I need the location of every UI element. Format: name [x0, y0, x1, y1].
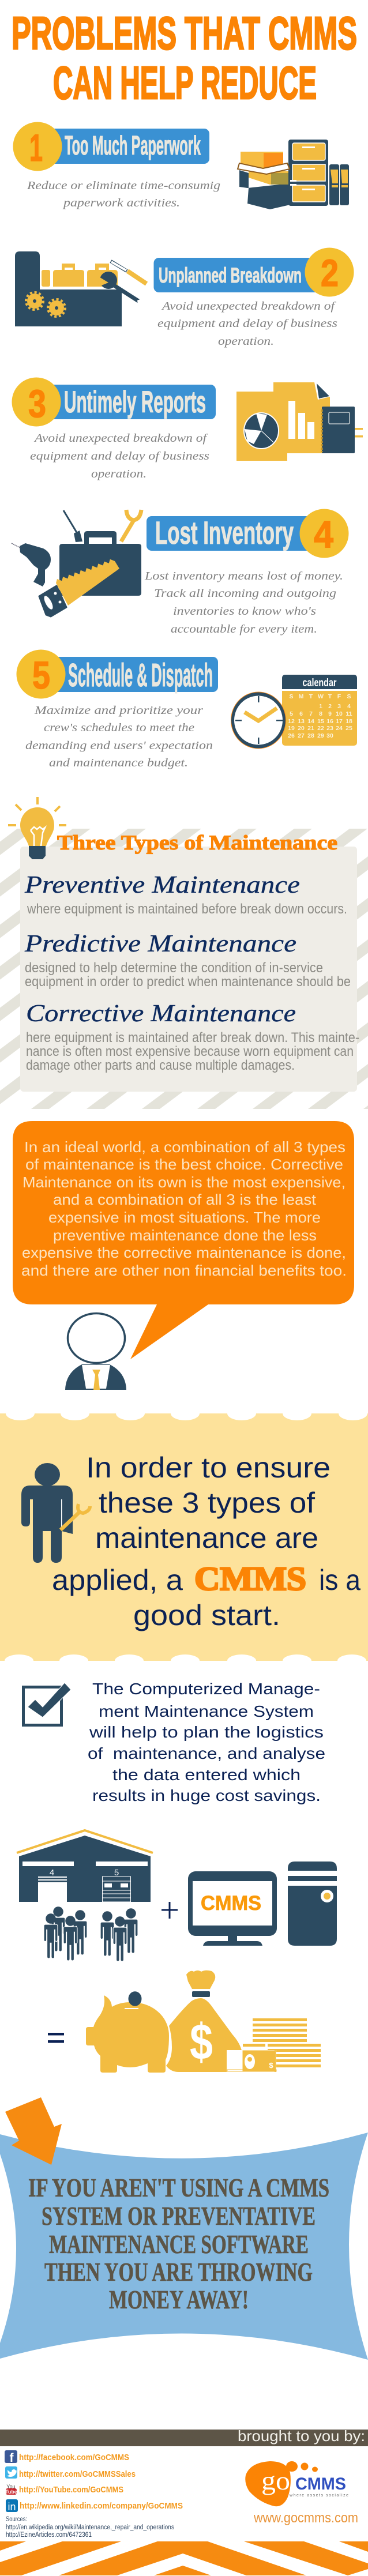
heading bar: untimely reports: 3	[28, 382, 46, 426]
logo: gocmms: CMMS	[295, 2475, 346, 2494]
icon: calendar: T	[309, 693, 313, 700]
description 5: Maximize and prioritize your	[34, 704, 203, 717]
description 3: Avoid unexpected breakdown of	[33, 432, 208, 445]
heading bar: schedule and dispatch: 5	[32, 654, 50, 697]
description 2: equipment and delay of business	[157, 317, 337, 330]
problem 1: too much paperwork	[13, 122, 349, 209]
logo: gocmms	[245, 2461, 348, 2506]
icon: clock	[231, 692, 286, 749]
icon: calendar: 15	[317, 718, 324, 725]
icon: computer with cmms	[188, 1862, 337, 1946]
description 2: Avoid unexpected breakdown of	[161, 300, 336, 313]
heading bar: untimely reports	[12, 377, 216, 427]
icon: calendar: 29	[317, 732, 324, 739]
icon: calendar: 6	[299, 710, 303, 717]
closing text	[28, 2173, 329, 2314]
icon: calendar: 9	[328, 710, 332, 717]
icon: calendar: 8	[319, 710, 322, 717]
icon: facebook	[5, 2450, 17, 2465]
icon: group of workers	[44, 1906, 138, 1961]
text: what the computerized maintenance system does: of maintenance, and analyse	[88, 1744, 325, 1762]
icon: calendar: 26	[288, 732, 295, 739]
icon: calendar: calendar	[302, 677, 337, 689]
text: what the computerized maintenance system does: ment Maintenance System	[99, 1702, 314, 1720]
heading bar: too much paperwork: 1	[29, 126, 43, 169]
icon: linkedin: in	[7, 2501, 16, 2513]
icon: calendar: F	[337, 693, 341, 700]
panel card	[20, 847, 357, 1092]
icon: calendar: 18	[346, 718, 352, 725]
callout: ideal world speech bubble	[13, 1121, 354, 1359]
icon: calendar: 3	[337, 703, 341, 710]
description 3: equipment and delay of business	[30, 450, 209, 462]
banner text: In order to ensure	[86, 1451, 331, 1484]
icon: warehouse: 4	[50, 1868, 54, 1878]
callout: ideal world speech bubble: Maintenance on its own is the most expensive,	[22, 1174, 346, 1191]
panel: closing message	[0, 2097, 368, 2360]
logo: gocmms: where assets socialize	[289, 2494, 348, 2498]
icon: worker with wrench	[21, 1463, 90, 1563]
title	[12, 7, 357, 108]
twitter link: http://twitter.com/GoCMMSSales	[19, 2469, 136, 2479]
description 5: and maintenance budget.	[49, 757, 188, 769]
footer bar: brought to you by	[0, 2427, 368, 2446]
description 4: Lost inventory means lost of money.	[144, 570, 343, 582]
icon: calendar: 5	[290, 710, 293, 717]
preventive maintenance: Preventive Maintenance	[24, 872, 300, 898]
icon: calendar: M	[299, 693, 304, 700]
icon: business person	[65, 1314, 126, 1390]
icon: report folder with charts and notebook	[236, 382, 363, 461]
footer bar: brought to you by: brought to you by:	[238, 2427, 365, 2445]
description 1	[27, 179, 220, 209]
panel: three types of maintenance	[0, 797, 368, 1109]
icon: calendar: 19	[288, 725, 295, 732]
icon: piggy bank, money bag and cash: $	[190, 2013, 213, 2070]
heading bar: too much paperwork	[13, 122, 209, 171]
problem 5: schedule and dispatch	[16, 649, 357, 769]
heading bar: lost inventory	[147, 509, 348, 558]
callout: ideal world speech bubble: preventive maintenance done the less	[53, 1227, 317, 1244]
banner text: CMMS	[194, 1560, 306, 1597]
text: what the computerized maintenance system does: the data entered which	[112, 1766, 301, 1784]
banner text: good start.	[133, 1599, 280, 1631]
icon: calendar: 4	[347, 703, 351, 710]
heading bar: untimely reports: Untimely Reports	[64, 385, 206, 419]
icon: calendar: 16	[326, 718, 333, 725]
youtube link: http://YouTube.com/GoCMMS	[19, 2485, 123, 2495]
panel: cmms banner	[0, 1407, 368, 1667]
icon: youtube: Tube	[5, 2489, 17, 2495]
callout: ideal world speech bubble: and there are other non financial benefits too.	[21, 1262, 347, 1279]
icon: filing cabinet and paper stacks	[238, 140, 349, 209]
icon: calendar: 24	[336, 725, 343, 732]
icon: calendar: S	[347, 693, 351, 700]
icon: calendar: 22	[317, 725, 324, 732]
text: what the computerized maintenance system does	[88, 1680, 325, 1804]
text: what the computerized maintenance system does: will help to plan the logistics	[89, 1723, 324, 1741]
description 2	[157, 300, 337, 348]
description 4: inventories to know who's	[173, 605, 316, 618]
icon: computer with cmms: CMMS	[201, 1892, 261, 1915]
website url: www.gocmms.com	[253, 2510, 358, 2526]
icon: warehouse: 5	[114, 1868, 119, 1878]
striped background	[0, 829, 368, 1109]
icon: calendar: 1	[319, 703, 322, 710]
icon: youtube: You	[6, 2484, 16, 2489]
icon: light bulb	[8, 797, 66, 859]
callout: ideal world speech bubble: expensive in most situations. The more	[48, 1209, 321, 1226]
banner text: applied, a	[52, 1564, 183, 1596]
heading: Three Types of Maintenance	[57, 831, 337, 854]
icon: calendar: T	[328, 693, 332, 700]
banner text: these 3 types of	[99, 1487, 315, 1519]
icon: calendar: 30	[326, 732, 333, 739]
icon: linkedin	[6, 2499, 18, 2513]
icon: calendar: 10	[336, 710, 343, 717]
predictive maintenance: designed to help determine the condition of in-service	[25, 960, 323, 976]
closing text: MONEY AWAY!	[109, 2285, 249, 2314]
description 5: demanding end users' expectation	[25, 739, 213, 752]
banner text: maintenance are	[95, 1522, 318, 1554]
predictive maintenance	[24, 931, 351, 990]
description 3: operation.	[91, 468, 147, 480]
description 3	[30, 432, 209, 480]
icon: calendar: 2	[328, 703, 332, 710]
preventive maintenance	[24, 872, 347, 917]
icon: calendar: W	[318, 693, 324, 700]
description 4: Track all incoming and outgoing	[154, 587, 336, 600]
callout: ideal world speech bubble: and a combination of all 3 is the least	[53, 1191, 317, 1208]
icon: calendar: 7	[309, 710, 313, 717]
banner text: is a	[319, 1564, 361, 1596]
heading bar: too much paperwork: Too Much Paperwork	[65, 130, 201, 160]
corrective maintenance	[26, 1001, 359, 1073]
heading bar: schedule and dispatch	[16, 649, 218, 699]
icon: calendar: 27	[298, 732, 305, 739]
equals sign	[48, 2033, 64, 2043]
social links	[5, 2450, 183, 2513]
corrective maintenance: Corrective Maintenance	[26, 1001, 296, 1027]
icon: youtube	[5, 2484, 17, 2495]
icon: calendar: 12	[288, 718, 295, 725]
linkedin link: http://www.linkedin.com/company/GoCMMS	[20, 2501, 183, 2511]
description 5	[25, 704, 213, 769]
plus sign	[162, 1902, 178, 1919]
icon: calendar: 14	[307, 718, 314, 725]
icon: calendar: 21	[307, 725, 314, 732]
icon: calendar: 13	[298, 718, 305, 725]
description 4	[144, 570, 343, 635]
heading bar: unplanned breakdown	[153, 248, 354, 296]
callout: ideal world speech bubble: expensive the corrective maintenance is done,	[22, 1244, 346, 1261]
description 1: paperwork activities.	[62, 197, 180, 209]
icon: piggy bank, money bag and cash: $	[269, 2061, 273, 2070]
icon: calendar: S	[289, 693, 294, 700]
banner text	[52, 1451, 361, 1631]
callout: ideal world speech bubble: of maintenance is the best choice. Corrective	[25, 1156, 343, 1173]
logo: gocmms: go	[261, 2466, 290, 2495]
icon: calendar: 23	[326, 725, 333, 732]
corrective maintenance: damage other parts and cause multiple damages.	[26, 1058, 295, 1073]
sources	[6, 2516, 174, 2539]
description 5: crew's schedules to meet the	[44, 721, 194, 734]
footer chevrons	[0, 2541, 368, 2575]
callout: ideal world speech bubble: In an ideal world, a combination of all 3 types	[24, 1138, 346, 1156]
icon: toolbox with gears, wrench and screwdriver	[15, 251, 147, 326]
icon: checkbox	[23, 1683, 71, 1725]
icon: piggy bank, money bag and cash	[86, 1970, 321, 2073]
text: what the computerized maintenance system does: The Computerized Manage-	[92, 1680, 320, 1698]
problem 3: untimely reports	[12, 377, 363, 480]
icon: twitter	[5, 2466, 17, 2479]
icon: facebook: f	[9, 2451, 14, 2465]
predictive maintenance: Predictive Maintenance	[24, 931, 296, 957]
text: what the computerized maintenance system does: results in huge cost savings.	[92, 1787, 321, 1804]
icon: calendar: 11	[346, 710, 352, 717]
description 2: operation.	[218, 335, 274, 348]
sources: http://en.wikipedia.org/wiki/Maintenance,_repair_and_operations	[6, 2524, 174, 2531]
arrow	[5, 2097, 62, 2165]
sources: http://EzineArticles.com/6472361	[6, 2532, 92, 2539]
description 1: Reduce or eliminate time-consumig	[27, 179, 220, 192]
icon: calendar: 25	[346, 725, 352, 732]
problem 2: unplanned breakdown	[15, 248, 354, 348]
heading bar: lost inventory: 4	[314, 513, 333, 555]
description 4: accountable for every item.	[171, 623, 317, 635]
icon: calendar: 28	[307, 732, 314, 739]
icon: tool case, drill, saw	[12, 510, 141, 616]
icon: warehouse	[17, 1830, 153, 1902]
icon: calendar: 20	[298, 725, 305, 732]
heading bar: unplanned breakdown: 2	[321, 251, 339, 294]
icon: calendar	[282, 675, 357, 746]
sources: Sources:	[6, 2516, 27, 2523]
problem 4: lost inventory	[12, 509, 348, 635]
icon: calendar: 17	[336, 718, 343, 725]
facebook link: http://facebook.com/GoCMMS	[19, 2453, 129, 2462]
